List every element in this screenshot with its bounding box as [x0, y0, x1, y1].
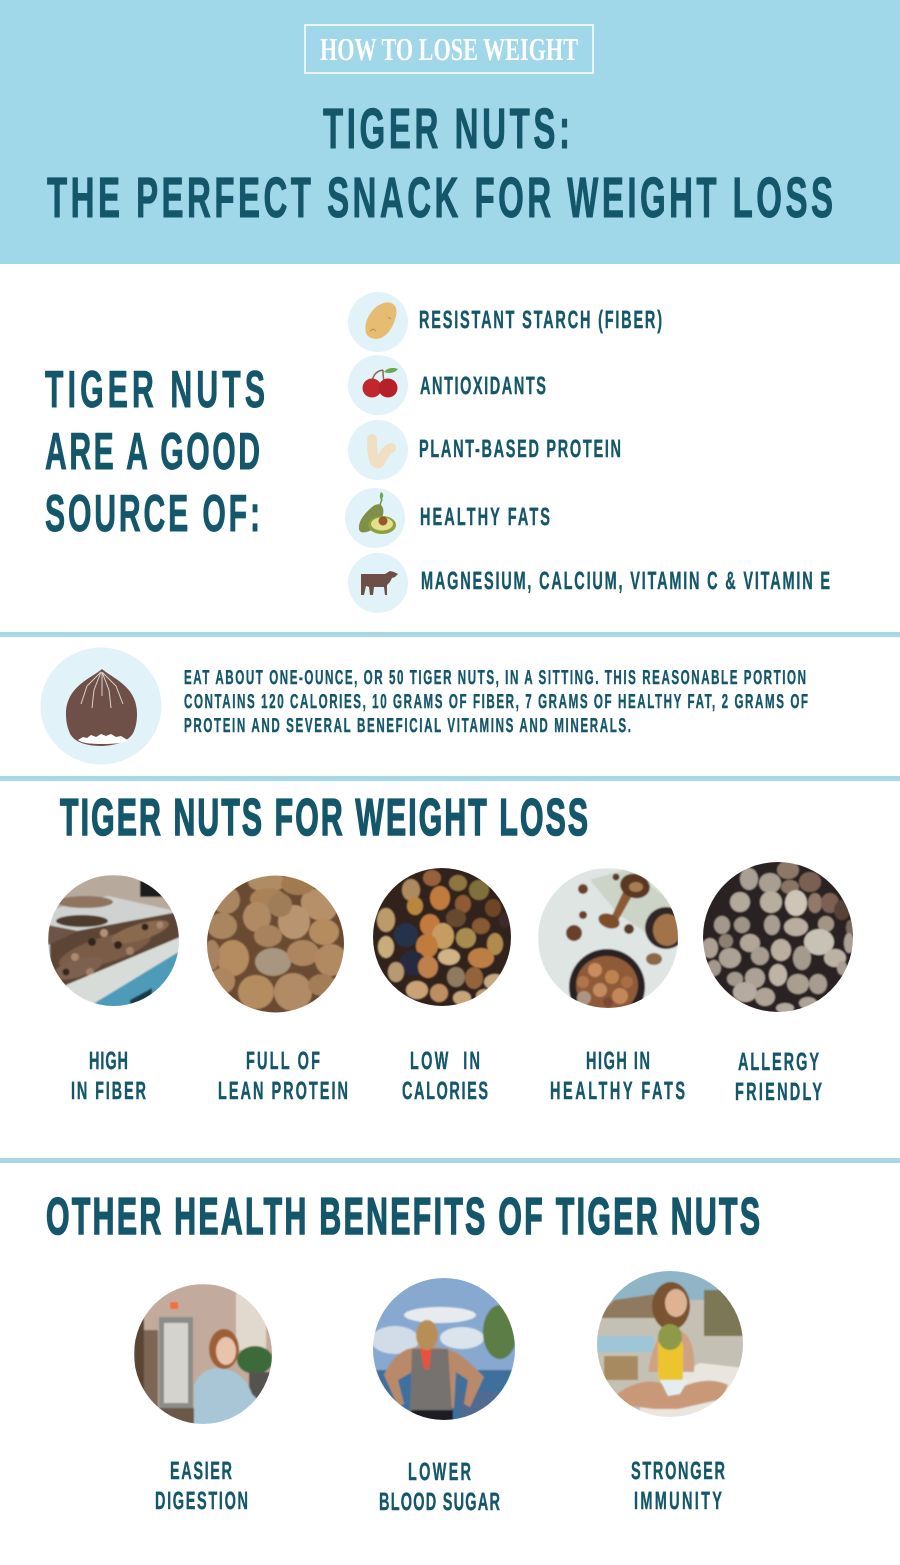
- heading: good source of: ARE A GOOD: [45, 423, 260, 481]
- label: allergy friendly: [735, 1048, 822, 1106]
- label: lower blood sugar: [379, 1458, 500, 1516]
- label: high in fiber: [71, 1047, 146, 1105]
- photo: woman laughing indoors: [134, 1284, 274, 1426]
- photo: tan walnuts: [204, 872, 347, 1016]
- label: high in healthy fats: [550, 1047, 685, 1105]
- portion text: PROTEIN AND SEVERAL BENEFICIAL VITAMINS AND MINERALS.: [184, 715, 631, 737]
- label: high in healthy fats: HEALTHY FATS: [550, 1077, 685, 1105]
- header banner: [0, 0, 900, 264]
- label: stronger immunity: IMMUNITY: [634, 1487, 722, 1515]
- label: full of lean protein: [218, 1047, 348, 1105]
- label: low in calories: [402, 1047, 488, 1105]
- label: stronger immunity: [631, 1457, 725, 1515]
- portion text: CONTAINS 120 CALORIES, 10 GRAMS OF FIBER, 7 GRAMS OF HEALTHY FAT, 2 GRAMS OF: [184, 691, 808, 713]
- portion text: [184, 667, 808, 737]
- weight loss labels: [71, 1047, 822, 1106]
- heading: good source of: TIGER NUTS: [45, 361, 265, 419]
- photo: woman with yellow drink: [596, 1270, 744, 1418]
- photo: dark mixed walnuts: [372, 867, 512, 1007]
- item: plant-based protein: PLANT-BASED PROTEIN: [419, 435, 621, 463]
- heading: other health benefits: OTHER HEALTH BENEFITS OF TIGER NUTS: [46, 1188, 760, 1246]
- heading: good source of: [45, 361, 265, 543]
- label: high in fiber: HIGH: [89, 1047, 128, 1075]
- heading: good source of: SOURCE OF:: [45, 485, 260, 543]
- label: lower blood sugar: LOWER: [408, 1458, 471, 1486]
- nutrient list: [345, 292, 830, 613]
- portion text: EAT ABOUT ONE-OUNCE, OR 50 TIGER NUTS, IN A SITTING. THIS REASONABLE PORTION: [184, 667, 806, 689]
- main title: TIGER NUTS:: [323, 97, 570, 161]
- item: plant-based protein: [348, 420, 621, 480]
- label: easier digestion: EASIER: [170, 1457, 232, 1485]
- kicker label: how to lose weight: HOW TO LOSE WEIGHT: [320, 31, 578, 67]
- benefits labels: [155, 1457, 725, 1516]
- item: healthy fats: HEALTHY FATS: [420, 503, 550, 531]
- label: full of lean protein: LEAN PROTEIN: [218, 1077, 348, 1105]
- kicker label: how to lose weight: [305, 25, 593, 73]
- item: antioxidants: ANTIOXIDANTS: [420, 372, 546, 400]
- heading: weight loss: TIGER NUTS FOR WEIGHT LOSS: [60, 789, 588, 847]
- label: allergy friendly: FRIENDLY: [735, 1078, 822, 1106]
- label: high in healthy fats: HIGH IN: [586, 1047, 650, 1075]
- label: low in calories: LOW IN: [410, 1047, 480, 1075]
- item: minerals and vitamins: MAGNESIUM, CALCIUM, VITAMIN C & VITAMIN E: [421, 567, 830, 595]
- item: minerals and vitamins: [348, 553, 830, 613]
- photo: grey walnuts: [702, 861, 854, 1013]
- icon: tiger nut: [40, 648, 162, 764]
- photo: runner from behind: [371, 1277, 517, 1422]
- item: healthy fats: [345, 488, 550, 548]
- label: easier digestion: DIGESTION: [155, 1487, 248, 1515]
- label: stronger immunity: STRONGER: [631, 1457, 725, 1485]
- label: lower blood sugar: BLOOD SUGAR: [379, 1488, 500, 1516]
- main title: [47, 97, 833, 230]
- label: easier digestion: [155, 1457, 248, 1515]
- label: full of lean protein: FULL OF: [246, 1047, 320, 1075]
- label: high in fiber: IN FIBER: [71, 1077, 146, 1105]
- item: resistant starch: RESISTANT STARCH (FIBER): [419, 306, 662, 334]
- item: antioxidants: [348, 355, 546, 415]
- label: low in calories: CALORIES: [402, 1077, 488, 1105]
- item: resistant starch: [348, 292, 662, 352]
- photo: nuts in bowls: [538, 868, 678, 1008]
- label: allergy friendly: ALLERGY: [738, 1048, 819, 1076]
- photo: nuts on conveyor: [48, 875, 180, 1008]
- main title: THE PERFECT SNACK FOR WEIGHT LOSS: [47, 166, 833, 230]
